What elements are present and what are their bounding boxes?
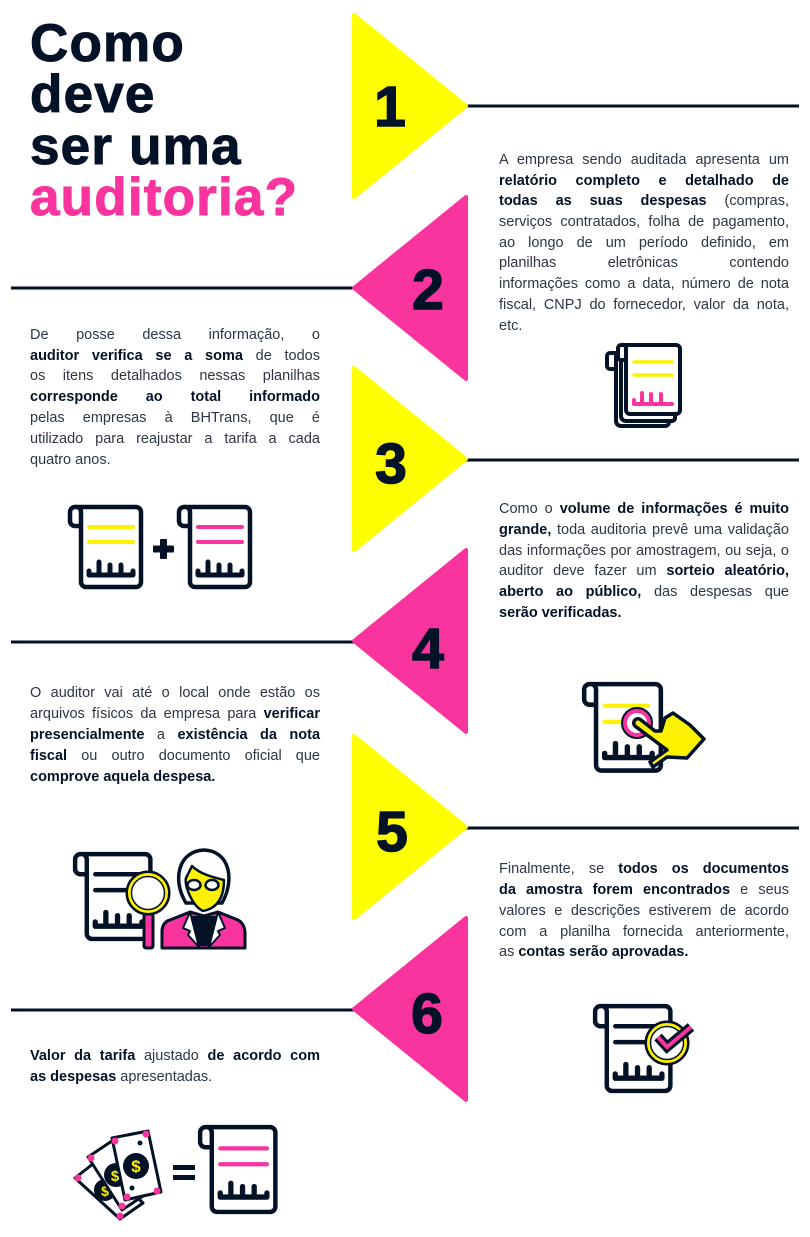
triangle 6 with number [354,918,466,1100]
triangle 3 with number [354,368,466,550]
text block: step 6: Valor da tarifa ajustado de acordo com [30,1048,320,1064]
triangle 5 with number: 5 [376,800,408,864]
title [30,14,298,227]
connector lines [11,106,799,1010]
title: auditoria? [30,168,298,227]
icon: plus sign [153,539,174,559]
triangle 4 with number: 4 [412,617,444,681]
icon: banknotes [74,1130,161,1220]
text block: step 1: relatório completo e detalhado de [499,173,789,189]
text block: step 4: presencialmente a existência da nota [30,727,320,743]
triangle 4 with number [354,550,466,732]
icon: stack of documents [607,345,680,426]
triangle 3 with number: 3 [375,432,407,496]
icon: banknotes: $ [101,1183,109,1199]
text block: step 2: quatro anos. [30,452,111,468]
text block: step 3: das informações por amostragem, ou seja, o [499,543,789,559]
icon: document with yellow lines [70,507,141,587]
text block: step 5: valores e descrições estiverem de acordo [499,903,789,919]
text block: step 2: utilizado para reajustar a tarifa a cada [30,431,320,447]
text block: step 3: aberto ao público, das despesas que [499,584,789,600]
icon: document with pink lines [179,507,250,587]
text block: step 2: corresponde ao total informado [30,389,320,405]
text block: step 6 [30,1048,320,1085]
triangle 1 with number: 1 [374,75,406,139]
text block: step 5: Finalmente, se todos os documentos [499,861,789,877]
text block: step 2 [30,327,320,468]
icon: final document with pink lines [200,1127,275,1212]
title: deve [30,65,156,124]
text block: step 1: A empresa sendo auditada apresenta um [499,152,789,168]
icon: banknotes: $ [131,1157,141,1176]
text block: step 5: da amostra forem encontrados e seus [499,882,789,898]
text block: step 3: Como o volume de informações é muito [499,501,789,517]
text block: step 2: pelas empresas à BHTrans, que é [30,410,320,426]
text block: step 1: etc. [499,318,522,334]
triangle 5 with number [354,736,466,918]
text block: step 1: serviços contratados, folha de pagamento, [499,214,789,230]
text block: step 2: os itens detalhados nessas planilhas [30,368,320,384]
title: Como [30,14,185,73]
text block: step 3 [499,501,789,621]
text block: step 4: arquivos físicos da empresa para verificar [30,706,320,722]
text block: step 2: De posse dessa informação, o [30,327,320,343]
text block: step 3: grande, toda auditoria prevê uma validação [499,522,789,538]
text block: step 5: com a planilha fornecida anteriormente, [499,924,789,940]
text block: step 3: auditor deve fazer um sorteio aleatório, [499,563,789,579]
icon: document, magnifier and auditor [75,850,245,948]
text block: step 5: as contas serão aprovadas. [499,944,688,960]
text block: step 4: fiscal ou outro documento oficial que [30,748,320,764]
icon: equals sign [173,1165,195,1180]
icon: document with pointing hand [584,684,704,771]
text block: step 4: comprove aquela despesa. [30,769,215,785]
text block: step 6: as despesas apresentadas. [30,1069,212,1085]
text block: step 2: auditor verifica se a soma de todos [30,348,320,364]
icon: document with check mark [595,1006,691,1091]
title: ser uma [30,117,242,176]
triangle 2 with number: 2 [412,258,444,322]
text block: step 4 [30,685,320,785]
text block: step 1: ao longo de um período definido, em [499,235,789,251]
icon: banknotes: $ [111,1168,120,1185]
text block: step 3: serão verificadas. [499,605,622,621]
text block: step 1 [499,152,789,334]
text block: step 1: informações como a data, número de nota [499,276,789,292]
text block: step 1: fiscal, CNPJ do fornecedor, valor da nota, [499,297,789,313]
triangle 1 with number [354,15,466,197]
text block: step 1: todas as suas despesas (compras, [499,193,789,209]
triangle 2 with number [354,197,466,379]
text block: step 1: planilhas eletrônicas contendo [499,255,789,271]
text block: step 4: O auditor vai até o local onde estão os [30,685,320,701]
text block: step 5 [499,861,789,960]
triangle 6 with number: 6 [411,982,443,1046]
